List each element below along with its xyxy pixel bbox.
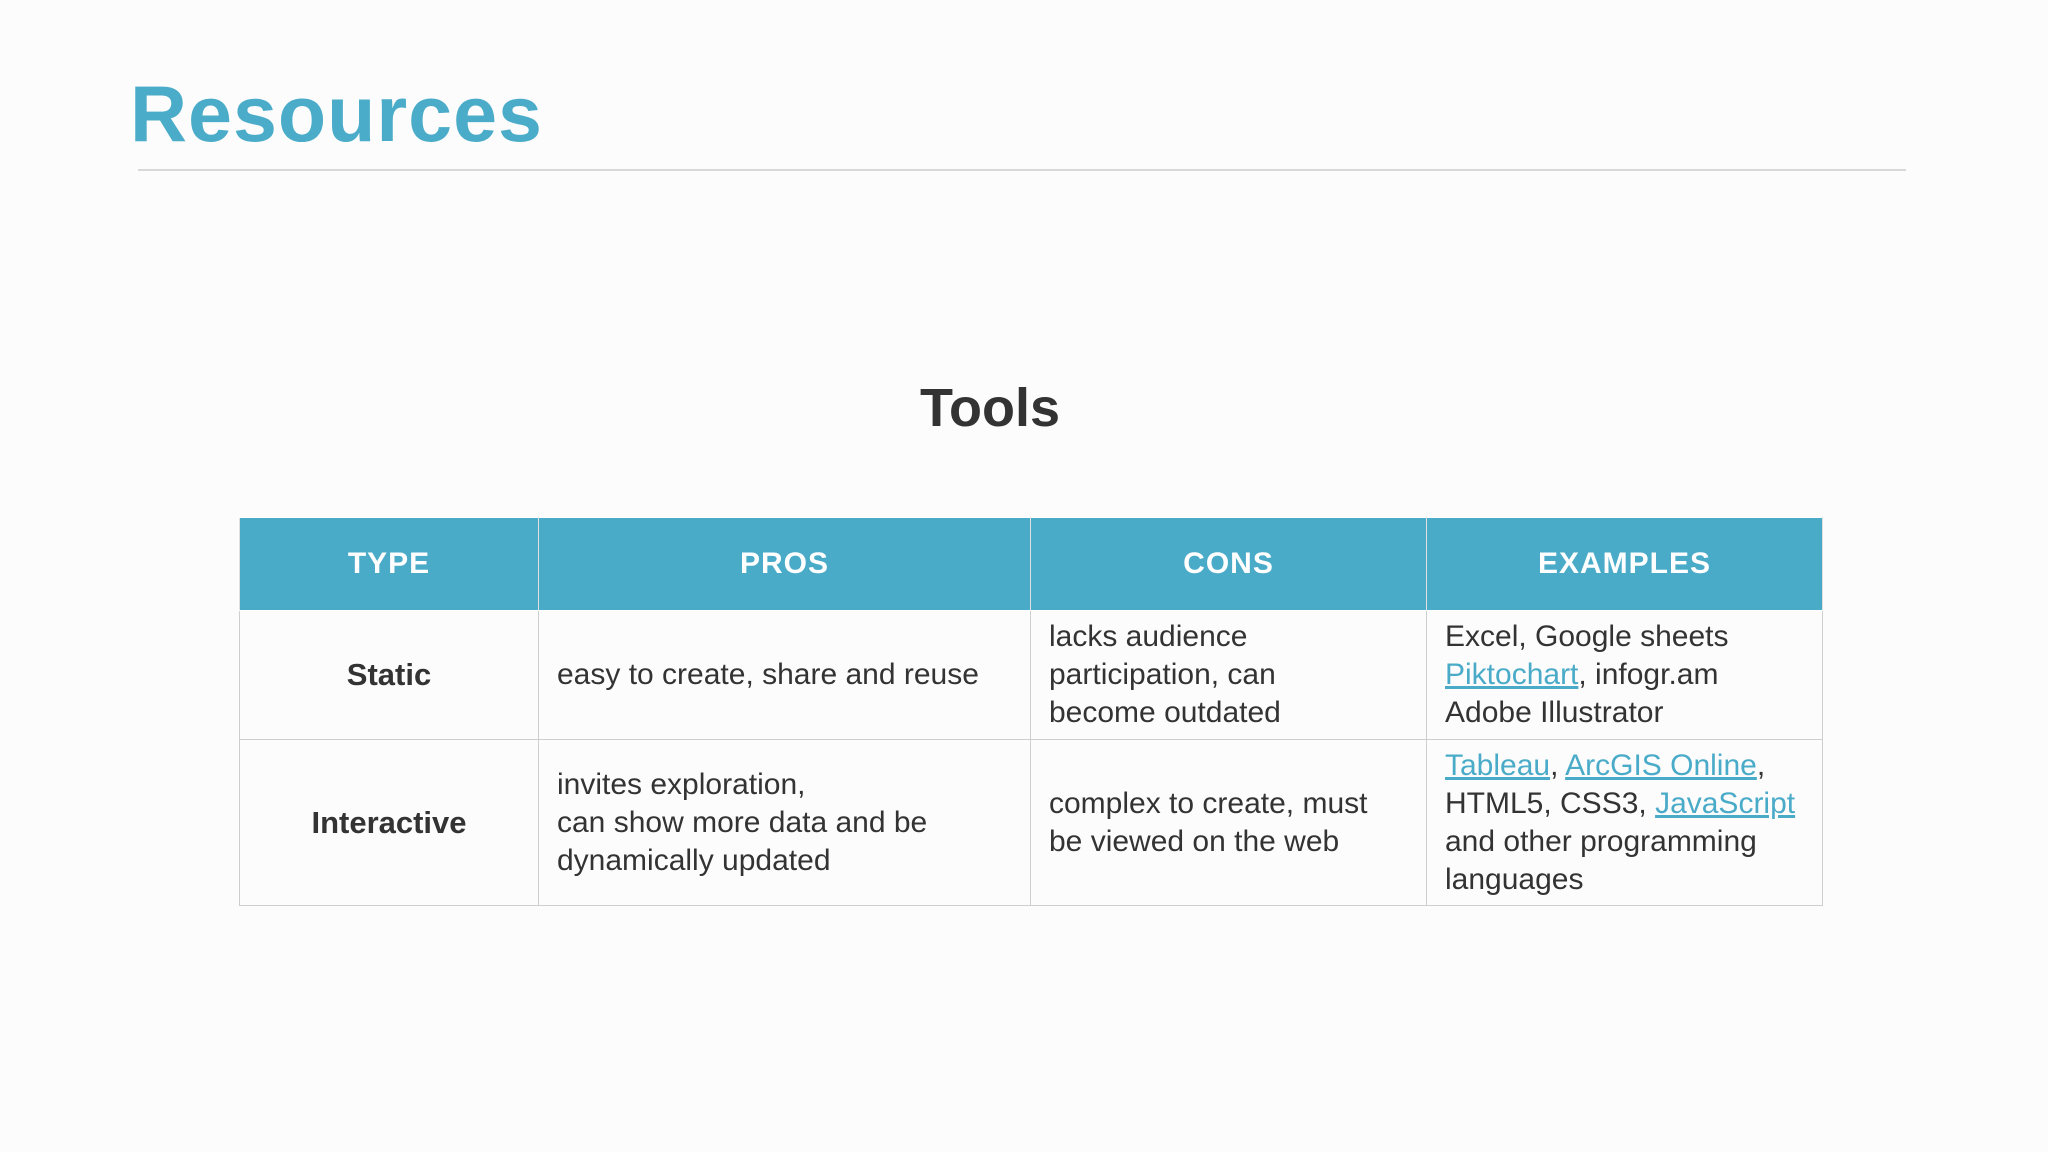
table: tools: CONS [1183, 547, 1274, 580]
table: tools: TYPE [348, 547, 430, 580]
table: tools: Static [347, 657, 431, 692]
table: tools: Tableau, ArcGIS Online, HTML5, CSS3, JavaScript and other programming languages [1445, 748, 1795, 896]
table: tools: easy to create, share and reuse [557, 658, 979, 691]
table: tools: Interactive [311, 804, 467, 840]
table: tools [239, 517, 1823, 906]
title: Resources [130, 69, 543, 158]
table: tools: Excel, Google sheets Piktochart, infogr.am Adobe Illustrator [1445, 620, 1728, 729]
table: tools: invites exploration, [557, 768, 805, 800]
table: tools: EXAMPLES [1538, 547, 1711, 580]
heading: Tools: Tools [920, 378, 1060, 438]
table: tools: complex to create, must be viewed on the web [1049, 786, 1367, 858]
table: tools: can show more data and be dynamically updated [557, 806, 927, 876]
table: tools: PROS [740, 547, 829, 580]
table: tools: lacks audience participation, can become outdated [1049, 620, 1281, 729]
